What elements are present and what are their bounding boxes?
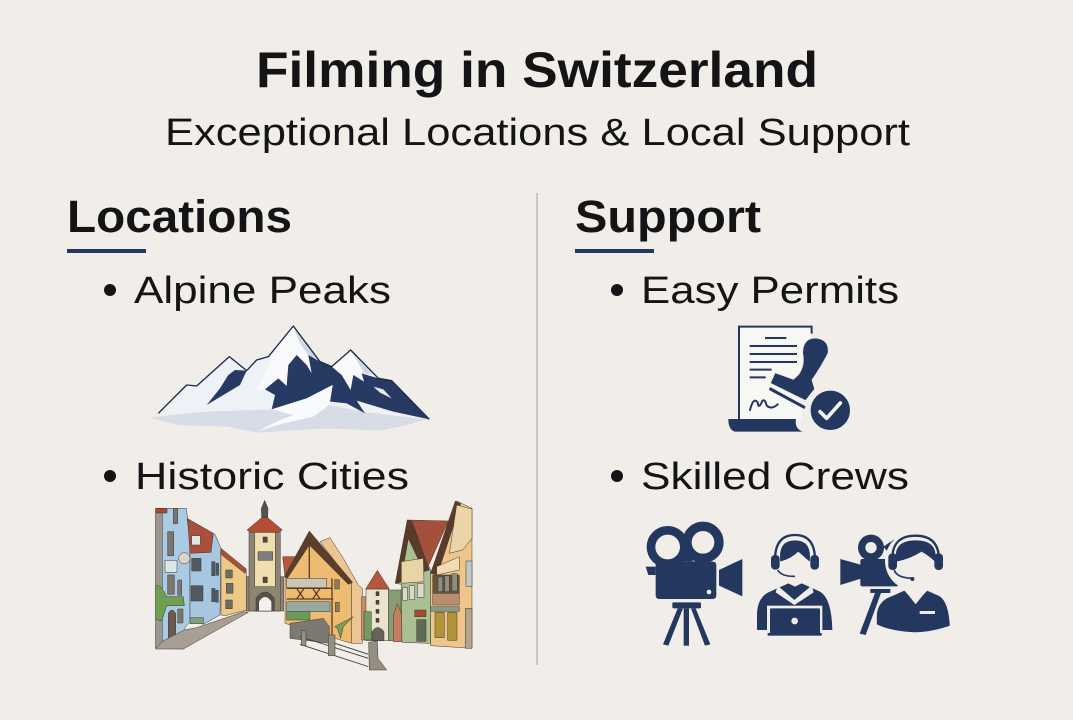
panel: locations bbox=[67, 191, 472, 670]
list item: skilled crews: Skilled Crews bbox=[641, 456, 909, 498]
left buildings bbox=[156, 508, 248, 649]
icon: operator with headset and laptop bbox=[757, 535, 832, 636]
half-timbered houses, centre bbox=[283, 531, 362, 643]
icon: snowy mountains bbox=[150, 326, 429, 433]
icon: camera operator with headset bbox=[840, 531, 951, 635]
icon: permit document with stamp bbox=[728, 327, 851, 432]
list item: alpine peaks: Alpine Peaks bbox=[134, 270, 391, 312]
subtitle: Exceptional Locations & Local Support bbox=[165, 112, 911, 154]
distant tower bbox=[362, 570, 402, 642]
list item: historic cities: Historic Cities bbox=[135, 456, 409, 498]
list item: easy permits: Easy Permits bbox=[641, 270, 899, 312]
right houses bbox=[395, 501, 472, 648]
icon: film camera on tripod bbox=[646, 526, 742, 646]
heading: locations: Locations bbox=[67, 191, 292, 242]
panel: support bbox=[575, 191, 951, 646]
street railing bbox=[300, 630, 387, 670]
gate tower bbox=[246, 500, 284, 611]
icon: crew group bbox=[646, 526, 951, 646]
title: Filming in Switzerland bbox=[256, 42, 818, 98]
heading: support: Support bbox=[575, 191, 761, 242]
illustration: historic town street bbox=[156, 500, 472, 670]
